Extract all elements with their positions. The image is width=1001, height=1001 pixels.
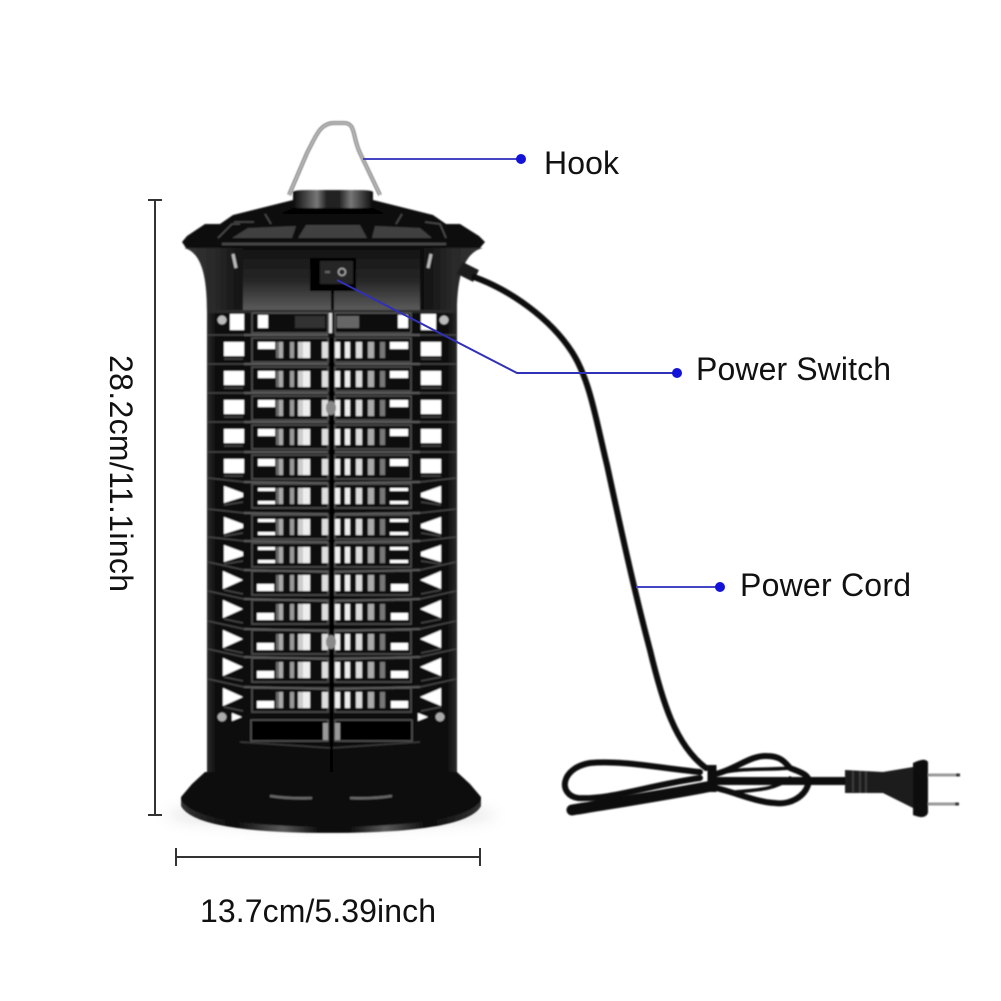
callout: power switch: Power Switch: [696, 351, 891, 387]
centre seam: [331, 290, 334, 320]
callout: power cord: [636, 567, 911, 603]
power cord: [460, 268, 846, 810]
power switch: [310, 258, 356, 291]
hanging hook: [289, 123, 380, 195]
switch panel: [243, 250, 420, 311]
callout: hook: Hook: [544, 145, 620, 181]
dimension: height: [103, 200, 162, 815]
right loops: [712, 756, 809, 803]
side clips: [233, 254, 431, 268]
callout: power cord: Power Cord: [740, 567, 911, 603]
plug lead: [716, 777, 846, 785]
bottom grille band: [218, 712, 444, 793]
cord grommet: [460, 268, 476, 276]
plug: [845, 760, 960, 817]
cap brim facets: [232, 225, 432, 238]
top cap cone: [182, 200, 485, 248]
left loop: [565, 762, 700, 798]
round foot: [181, 772, 481, 833]
callout: power switch: [337, 280, 891, 387]
grille rows: [208, 335, 456, 713]
dimension: width: [176, 848, 480, 929]
main cable: [474, 277, 706, 768]
dimension: width: 13.7cm/5.39inch: [200, 893, 436, 929]
top grille row: [207, 310, 457, 333]
flared neck: [184, 248, 483, 312]
product: bug zapper lamp: [166, 123, 496, 833]
cap collar: [293, 190, 373, 208]
prongs: [928, 775, 958, 804]
callout: hook: [363, 145, 620, 181]
lamp body: [207, 277, 457, 790]
base shadow: [166, 803, 496, 827]
lower bundle: [572, 786, 712, 810]
dimension: height: 28.2cm/11.1inch: [103, 355, 139, 592]
